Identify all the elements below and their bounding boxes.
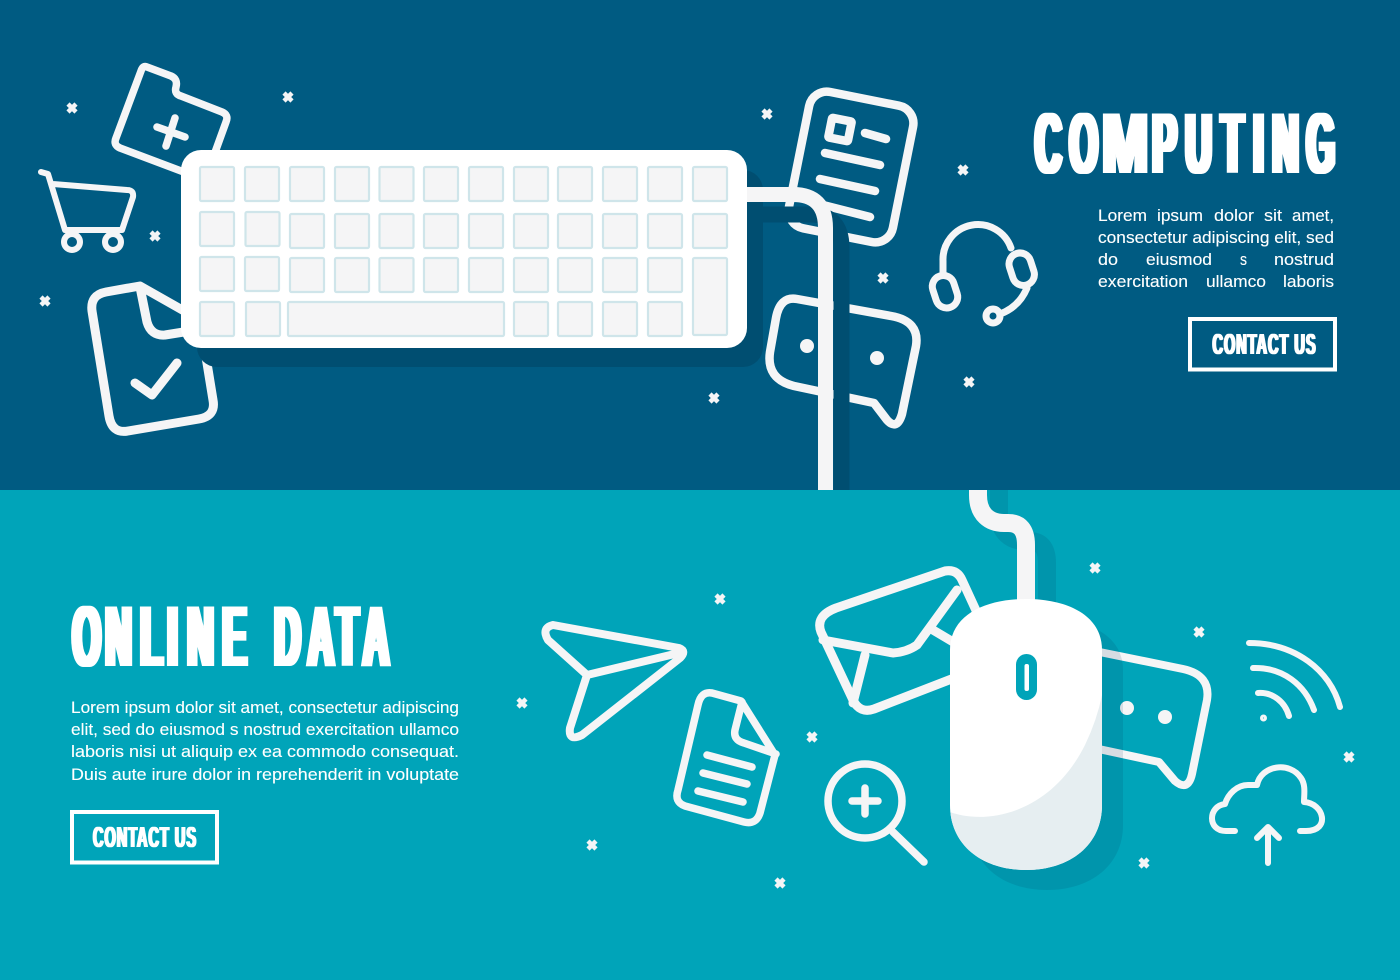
keyboard	[181, 150, 747, 348]
button: contact us (online data)	[72, 812, 217, 862]
keyboard and cable shadow	[197, 170, 842, 500]
icon: folder with plus	[115, 66, 227, 180]
heading: online data: ONLINE DATA	[73, 588, 389, 684]
icon: file with lines	[677, 693, 776, 823]
text block: computing description: sit	[1264, 206, 1282, 225]
icon: magnifier with plus	[828, 764, 924, 862]
text block: online data description: Lorem ipsum dolor sit amet, consectetur adipiscing	[71, 698, 459, 717]
text block: computing description: Lorem	[1098, 206, 1147, 225]
text block: computing description	[1098, 206, 1334, 291]
scroll wheel	[1016, 654, 1037, 700]
mouse	[950, 599, 1102, 880]
text block: online data description: Duis aute irure dolor in reprehenderit in voluptate	[71, 765, 459, 784]
text block: online data description: laboris nisi ut aliquip ex ea commodo consequat.	[71, 742, 459, 761]
icon: speech bubble	[770, 299, 916, 424]
text block: computing description: laboris	[1283, 272, 1334, 291]
icon: document with check	[92, 286, 213, 431]
text block: computing description: ipsum	[1157, 206, 1203, 225]
text block: online data description	[71, 698, 459, 784]
keys row 2	[200, 212, 727, 248]
text block: computing description: dolor	[1214, 206, 1254, 225]
text block: computing description: nostrud	[1274, 250, 1334, 269]
button: contact us (computing): CONTACT US	[1212, 327, 1316, 360]
button: contact us (online data): CONTACT US	[93, 820, 196, 853]
keyboard cable	[740, 194, 826, 490]
text block: computing description: ullamco	[1206, 272, 1266, 291]
mouse cord	[978, 490, 1026, 605]
icon: envelope	[820, 571, 985, 710]
icon: headset	[929, 225, 1037, 323]
icon: document with lines	[785, 88, 917, 246]
text block: computing description: exercitation	[1098, 272, 1188, 291]
text block: online data description: elit, sed do eiusmod s nostrud exercitation ullamco	[71, 720, 459, 739]
keys row 4 with space bar	[200, 302, 682, 336]
keys row 3	[200, 257, 727, 335]
heading: computing: COMPUTING	[1035, 95, 1335, 191]
panel: online data	[0, 470, 1400, 980]
text block: computing description: amet,	[1292, 206, 1334, 225]
icon: cloud upload	[1212, 767, 1322, 863]
icon: paper plane	[545, 625, 683, 737]
icon: wifi signal	[1249, 643, 1340, 720]
text block: computing description: eiusmod	[1146, 250, 1212, 269]
decorative x marks	[41, 93, 973, 402]
icon: chat bubble	[1080, 648, 1208, 785]
button: contact us (computing)	[1190, 319, 1335, 370]
text block: computing description: s	[1240, 250, 1247, 269]
decorative x marks	[518, 564, 1353, 887]
text block: computing description: consectetur adipiscing elit, sed	[1098, 228, 1334, 247]
panel: computing	[0, 0, 1400, 500]
icon: shopping cart	[41, 172, 133, 250]
text block: computing description: do	[1098, 250, 1118, 269]
mouse and cord shadow	[980, 490, 1123, 890]
keys row 1	[200, 167, 727, 201]
